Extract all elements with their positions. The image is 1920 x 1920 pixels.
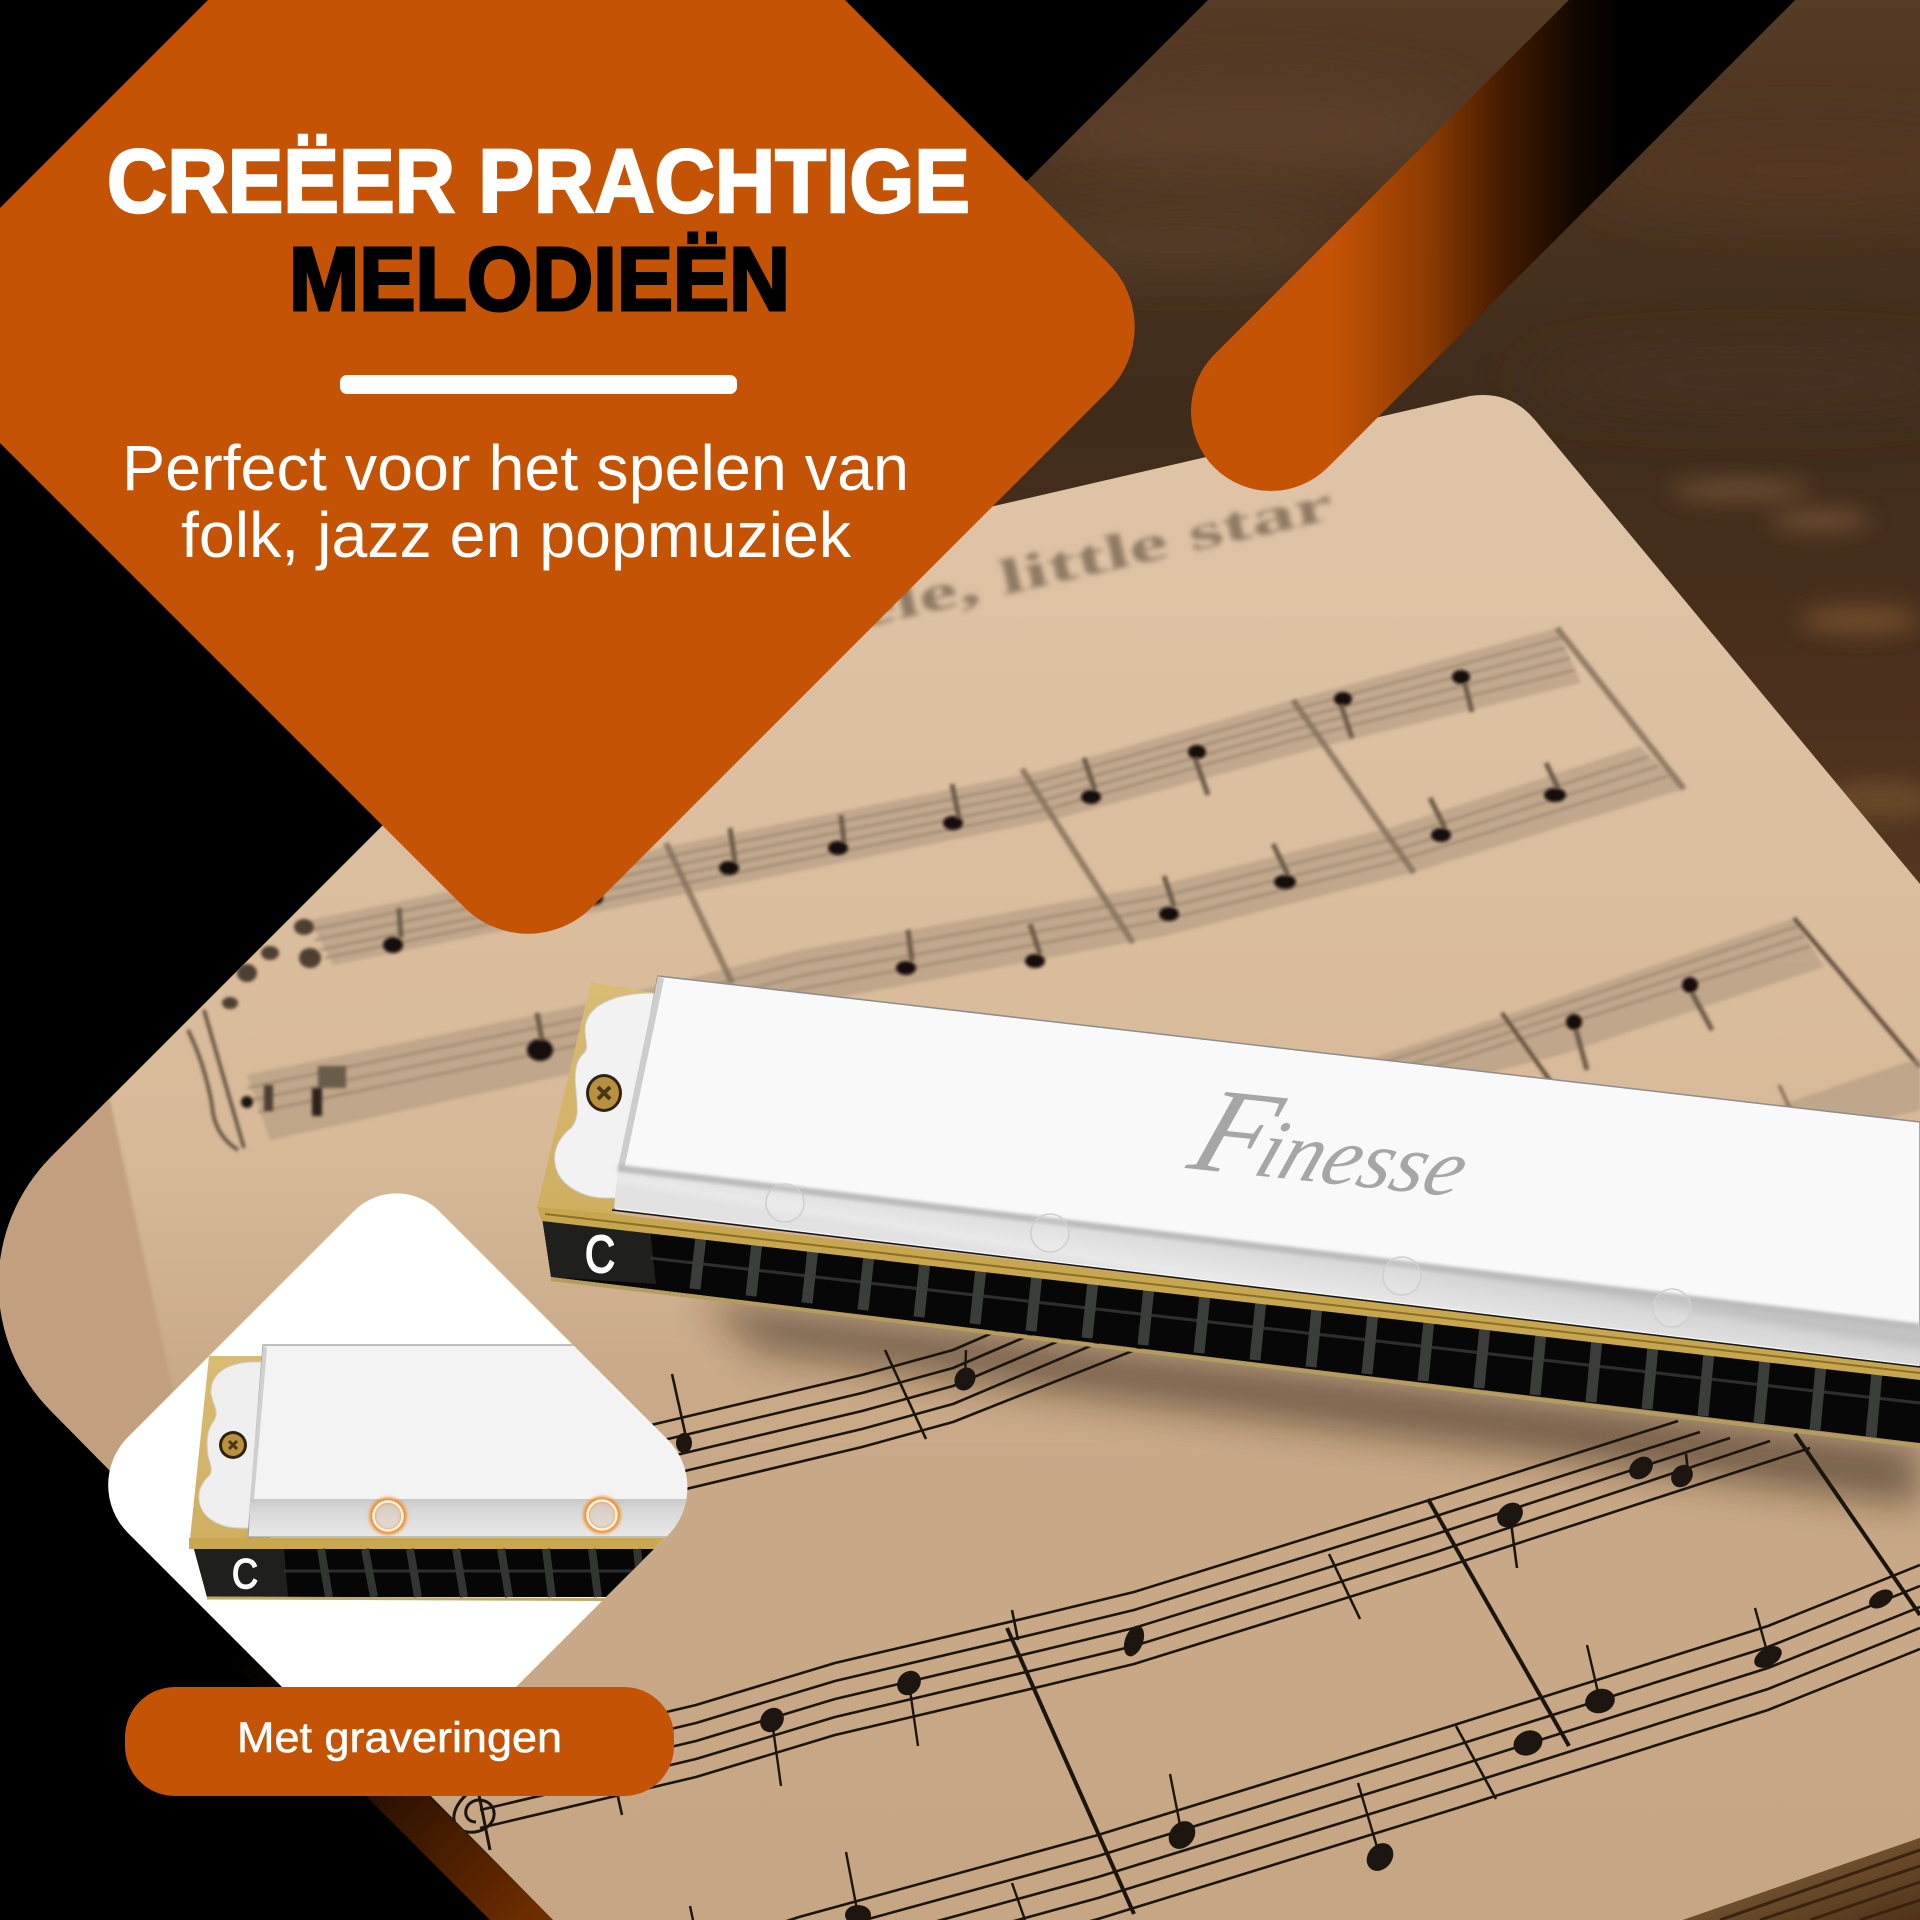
inset panel: detail of engravings	[108, 1193, 730, 1779]
white divider bar	[340, 375, 737, 394]
key signature and clef	[222, 919, 346, 1116]
main harmonica	[537, 976, 1920, 1446]
inset screw	[219, 1431, 247, 1459]
glowing ring 2	[586, 1499, 618, 1531]
blurred upper staves	[188, 628, 1920, 1150]
wooden table	[992, 0, 1920, 884]
sharp notes	[676, 1364, 1896, 1920]
shadow of harmonica on paper	[700, 1300, 1920, 1505]
glowing ring 1	[372, 1500, 404, 1532]
decorative brown band lower left	[130, 1560, 560, 1920]
gold strip	[537, 1207, 1920, 1380]
staff C	[700, 1565, 1920, 1920]
bottom gold line	[551, 1279, 1920, 1446]
inset scalloped plate	[199, 1362, 265, 1528]
scalloped white plate	[555, 993, 660, 1198]
stems	[690, 1350, 1768, 1920]
key panel	[542, 1217, 656, 1284]
subtitle: Perfect voor het spelen van	[122, 432, 909, 504]
label pill	[125, 1687, 674, 1796]
decorative gradient bar top right	[1271, 0, 1900, 411]
comb tines	[695, 1236, 1877, 1437]
inset letter C: C	[232, 1550, 258, 1597]
engraved holes	[766, 1184, 1691, 1327]
black comb	[542, 1217, 1920, 1443]
gold side plate	[537, 982, 660, 1215]
staff A	[652, 1330, 1142, 1490]
screw	[586, 1074, 622, 1112]
page stack, lower right	[1683, 1838, 1920, 1920]
engraved logo: Finesse	[1175, 1063, 1493, 1222]
inset gold plate	[189, 1356, 270, 1549]
blurred notes	[383, 670, 1712, 1070]
letter C: C	[585, 1226, 615, 1284]
cover top face	[614, 976, 1920, 1367]
orange diamond panel	[0, 0, 1135, 934]
cover bevel	[614, 1167, 1920, 1365]
staff B	[480, 1421, 1810, 1828]
inset black comb	[194, 1549, 720, 1597]
subtitle: folk, jazz en popmuziek	[181, 499, 852, 571]
sharp lower staves	[480, 1295, 1920, 1920]
heading line 1: CREËER PRACHTIGE	[107, 132, 970, 232]
page fold, left	[0, 1095, 175, 1500]
bar lines	[1007, 1434, 1920, 1914]
treble clef	[454, 1790, 494, 1850]
paper sheet	[0, 395, 1920, 1920]
label pill: Met graveringen	[237, 1714, 562, 1762]
comb divider	[650, 1258, 1920, 1403]
inset cover	[248, 1345, 730, 1537]
subtitle	[122, 432, 909, 571]
blurred title on sheet: ele, little star	[850, 474, 1338, 639]
heading line 2: MELODIEËN	[289, 230, 790, 330]
cover left edge	[618, 976, 664, 1170]
